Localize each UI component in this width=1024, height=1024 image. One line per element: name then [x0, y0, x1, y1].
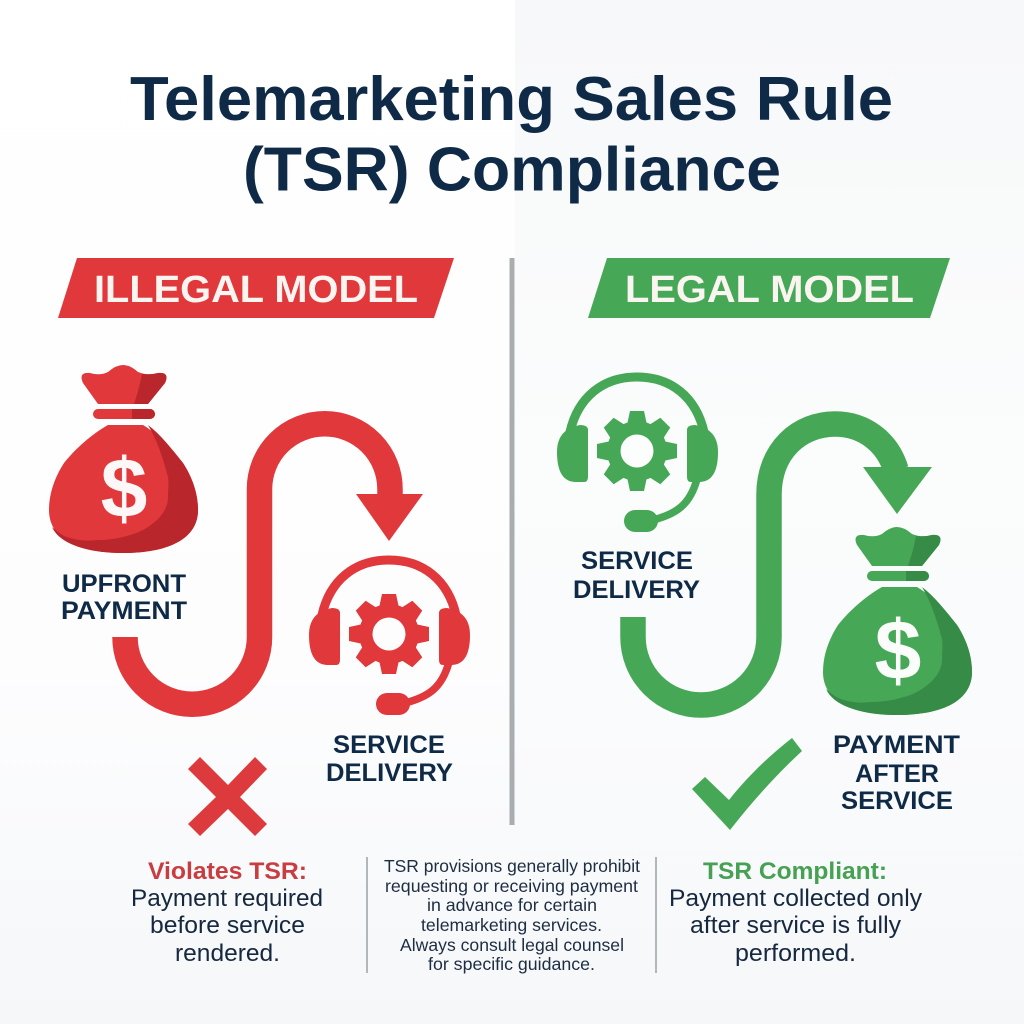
label: upfront payment — [61, 570, 187, 625]
label: upfront payment: UPFRONT — [62, 570, 186, 598]
text block: TSR provisions note: Always consult legal counsel — [400, 935, 624, 955]
text block: violates TSR: Payment required — [131, 885, 323, 912]
icon: green money bag: $ — [875, 603, 921, 697]
label: payment after service: AFTER — [855, 760, 939, 788]
label: payment after service — [833, 731, 960, 815]
label: service delivery: DELIVERY — [326, 759, 453, 787]
arrow: red s-curve — [125, 424, 423, 704]
text block: TSR provisions note: for specific guidance. — [428, 954, 595, 974]
arrow: green s-curve — [633, 424, 932, 705]
icon: red money bag — [49, 365, 198, 553]
label: upfront payment: PAYMENT — [61, 597, 187, 625]
icon: green money bag — [823, 527, 972, 715]
text block: TSR provisions note: telemarketing services. — [421, 915, 602, 935]
text block: TSR provisions note: requesting or receiving payment — [385, 876, 638, 896]
text block: TSR compliant: after service is fully — [690, 912, 901, 939]
banner: legal model — [588, 258, 950, 318]
text block: violates TSR: rendered. — [175, 940, 280, 967]
text block: TSR compliant: TSR Compliant: — [703, 858, 887, 885]
banner: illegal model — [58, 258, 454, 318]
label: service delivery — [326, 731, 453, 787]
panel: illegal model — [49, 365, 470, 836]
banner: legal model: LEGAL MODEL — [625, 269, 914, 311]
text block: TSR compliant: performed. — [735, 940, 856, 967]
label: payment after service: SERVICE — [841, 787, 953, 815]
title: Telemarketing Sales Rule — [130, 65, 893, 134]
text block: TSR compliant — [669, 858, 922, 967]
label: service delivery: DELIVERY — [573, 576, 700, 604]
banner: illegal model: ILLEGAL MODEL — [94, 269, 418, 311]
icon: red headset with gear — [309, 560, 470, 715]
icon: red cross — [188, 757, 267, 836]
text block: violates TSR: before service — [150, 912, 305, 939]
label: service delivery — [573, 547, 700, 604]
text block: TSR provisions note — [384, 856, 640, 974]
icon: green check mark — [692, 738, 802, 830]
title — [130, 65, 893, 204]
title: (TSR) Compliance — [243, 136, 781, 204]
icon: green headset with gear — [557, 377, 718, 532]
text block: TSR provisions note: in advance for certain — [427, 895, 597, 915]
label: service delivery: SERVICE — [581, 547, 693, 575]
text block: violates TSR: Violates TSR: — [148, 858, 307, 885]
panel: legal model — [557, 377, 972, 830]
text block: violates TSR — [131, 858, 323, 967]
text block: TSR provisions note: TSR provisions generally prohibit — [384, 856, 640, 876]
text block: TSR compliant: Payment collected only — [669, 885, 922, 912]
label: payment after service: PAYMENT — [833, 731, 960, 759]
icon: red money bag: $ — [101, 441, 147, 535]
label: service delivery: SERVICE — [333, 731, 445, 759]
